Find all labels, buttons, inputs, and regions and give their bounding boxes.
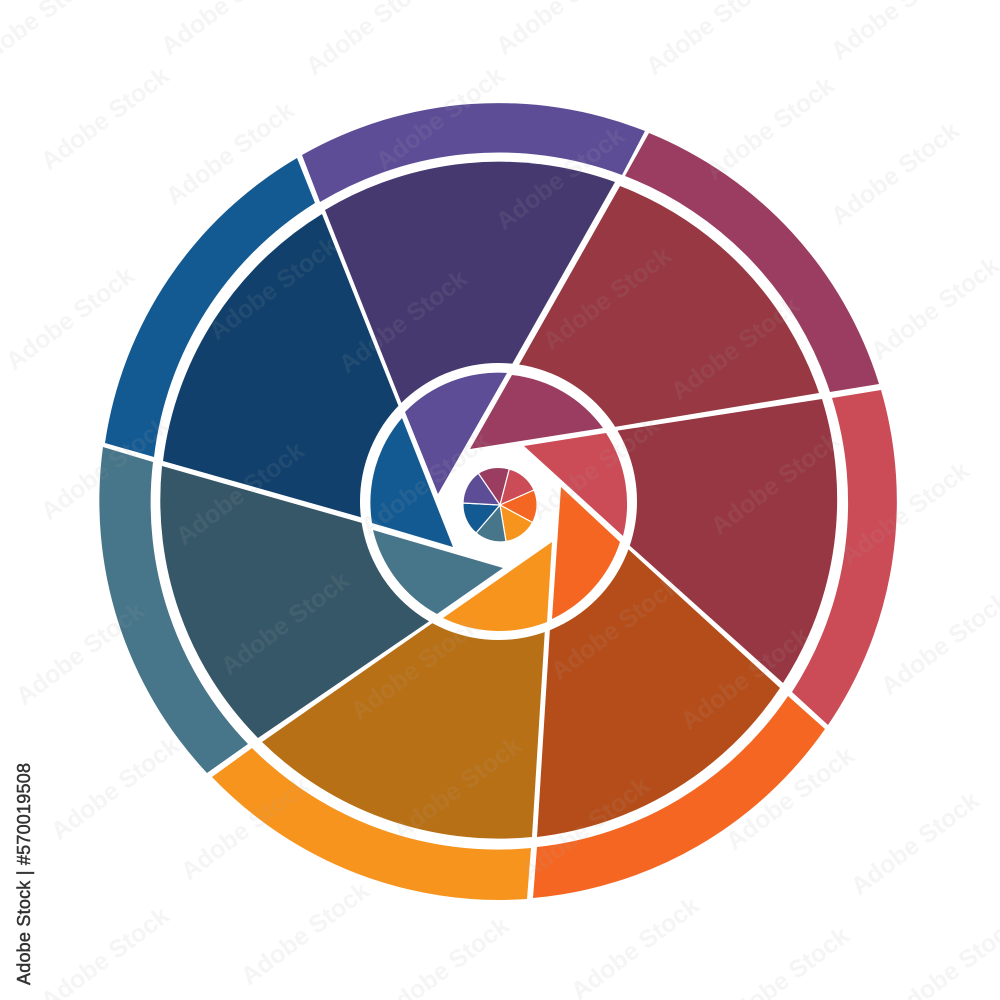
dark wedge: purple <box>325 162 615 460</box>
stock watermark pattern: Adobe Stock <box>538 241 677 356</box>
outer segment: blue <box>105 158 315 457</box>
stock watermark pattern: Adobe Stock <box>204 231 343 346</box>
outer ring of seven segments <box>99 103 897 900</box>
inner wedge: blue <box>370 418 453 547</box>
dark wedge: navy <box>163 214 424 534</box>
stock watermark pattern: Adobe Stock <box>161 96 300 211</box>
stock watermark pattern: Adobe Stock <box>388 731 527 846</box>
stock watermark pattern: Adobe Stock <box>826 116 965 231</box>
stock watermark pattern: Adobe Stock <box>171 436 310 551</box>
stock watermark pattern: Adobe Stock <box>356 426 495 541</box>
dark wedge: red upper <box>490 186 819 436</box>
outer segment: teal <box>99 447 248 773</box>
dark wedge: ochre <box>262 576 548 839</box>
small central pie <box>463 467 537 542</box>
stock watermark pattern: Adobe Stock <box>846 786 985 901</box>
dark wedge: brown <box>537 505 780 837</box>
stock watermark pattern: Adobe Stock <box>546 571 685 686</box>
stock watermark pattern: Adobe Stock <box>666 291 805 406</box>
outer segment: red <box>792 390 897 725</box>
stock watermark pattern: Adobe Stock <box>491 121 630 236</box>
inner wedge: orange <box>552 487 620 619</box>
outer segment: orange <box>533 696 825 898</box>
stock watermark pattern: Adobe Stock <box>334 264 473 379</box>
dark wedge: slate <box>160 466 500 738</box>
stock watermark pattern: Adobe Stock <box>46 731 185 846</box>
dark wedge: red right <box>570 399 837 683</box>
outer segment: amber <box>212 748 531 900</box>
stock watermark pattern: Adobe Stock <box>836 456 975 571</box>
stock watermark pattern: Adobe Stock <box>236 876 375 991</box>
stock watermark pattern: Adobe Stock <box>1 261 140 376</box>
inner wedge: purple <box>405 373 507 494</box>
inner wedge: red <box>524 433 627 536</box>
stock watermark pattern: Adobe Stock <box>676 621 815 736</box>
stock watermark pattern: Adobe Stock <box>701 71 840 186</box>
middle ring of seven dark wedges <box>160 162 837 839</box>
stock watermark pattern: Adobe Stock <box>36 411 175 526</box>
white hub disc <box>360 363 637 640</box>
stock watermark pattern: Adobe Stock <box>526 411 665 526</box>
stock watermark pattern: Adobe Stock <box>371 61 510 176</box>
stock watermark pattern: Adobe Stock <box>216 566 355 681</box>
stock watermark pattern: Adobe Stock <box>706 426 845 541</box>
inner ring of seven wedges <box>370 373 627 631</box>
inner wedge: teal <box>373 530 503 614</box>
stock watermark pattern: Adobe Stock <box>11 596 150 711</box>
stock watermark pattern: Adobe Stock <box>721 741 860 856</box>
inner wedge: amber <box>443 542 552 631</box>
side credit text: Adobe Stock | #570019508 <box>14 763 34 985</box>
inner wedge: berry <box>470 375 603 449</box>
stock watermark pattern: Adobe Stock <box>176 771 315 886</box>
stock watermark pattern: Adobe Stock <box>36 61 175 176</box>
stock watermark pattern: Adobe Stock <box>516 771 655 886</box>
outer segment: berry <box>625 133 879 392</box>
stock watermark pattern: Adobe Stock <box>346 611 485 726</box>
outer segment: purple <box>302 103 645 202</box>
